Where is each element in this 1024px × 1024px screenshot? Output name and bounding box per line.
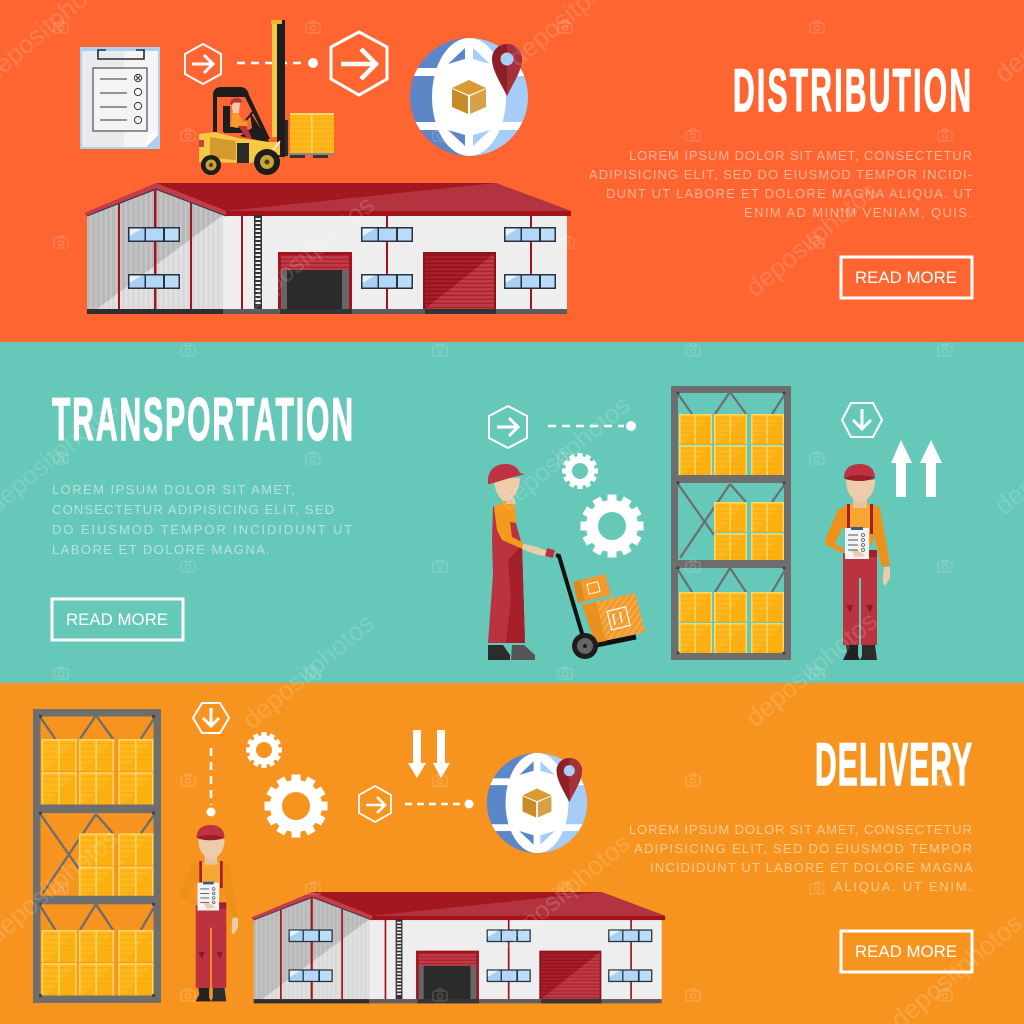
dashed connector with dot: [206, 748, 216, 816]
text block: transportation description: LOREM IPSUM DOLOR SIT AMET,: [52, 482, 295, 497]
icon: small gear: [246, 732, 282, 768]
icon: globe with parcel and location pin: [487, 753, 587, 853]
warehouse building: [251, 892, 665, 1003]
worker with clipboard: [825, 464, 890, 660]
icon: down arrows: [408, 730, 450, 778]
text block: distribution description: ADIPISICING ELIT, SED DO EIUSMOD TEMPOR INCIDI-: [589, 167, 972, 182]
text block: delivery description: LOREM IPSUM DOLOR SIT AMET, CONSECTETUR: [629, 822, 972, 837]
icon: large gear: [264, 774, 328, 838]
text block: transportation description: DO EIUSMOD TEMPOR INCIDIDUNT UT: [52, 522, 352, 537]
hand truck with boxes: [556, 555, 645, 659]
warehouse building: [84, 183, 571, 314]
dashed connector with dot: [405, 800, 474, 808]
icon: right arrow hexagon: [489, 406, 527, 448]
icon: right arrow hexagon: [359, 786, 391, 822]
watermark overlay: depositphotos: [740, 606, 883, 733]
watermark overlay: depositphotos: [740, 176, 883, 303]
icon: up arrows: [891, 440, 942, 497]
button: read more: [52, 599, 183, 640]
icon: globe with parcel and location pin: [410, 38, 528, 156]
title: Distribution: DISTRIBUTION: [733, 58, 971, 125]
button: read more: READ MORE: [66, 611, 168, 629]
text block: delivery description: ADIPISICING ELIT, SED DO EIUSMOD TEMPOR: [634, 841, 972, 856]
panel: delivery background: [0, 683, 1024, 1024]
watermark overlay: depositphotos: [237, 190, 380, 317]
icon: small gear: [562, 453, 598, 489]
icon: clipboard checklist: [80, 47, 160, 149]
text block: transportation description: LABORE ET DOLORE MAGNA.: [52, 542, 270, 557]
storage rack with crates: [33, 709, 161, 1003]
title: Delivery: DELIVERY: [815, 732, 972, 799]
text block: distribution description: ENIM AD MINIM VENIAM, QUIS.: [744, 205, 972, 220]
storage rack with crates: [671, 386, 791, 660]
text block: delivery description: INCIDIDUNT UT LABORE ET DOLORE MAGNA: [650, 860, 973, 875]
icon: forklift with driver and crate: [199, 20, 334, 175]
button: read more: READ MORE: [855, 269, 957, 287]
watermark overlay: depositphotos: [493, 828, 636, 955]
text block: transportation description: CONSECTETUR ADIPISICING ELIT, SED: [52, 502, 334, 517]
worker with clipboard: [179, 825, 238, 1001]
icon: down arrow hexagon: [193, 703, 229, 733]
watermark overlay: depositphotos: [493, 390, 636, 517]
icon: small right arrow hexagon: [185, 44, 221, 84]
panel: distribution background: [0, 0, 1024, 342]
dashed connector with dot: [237, 58, 318, 68]
dashed connector with dot: [548, 421, 636, 431]
text block: distribution description: DUNT UT LABORE ET DOLORE MAGNA ALIQUA. UT: [606, 186, 972, 201]
watermark overlay: depositphotos: [237, 608, 380, 735]
text block: distribution description: LOREM IPSUM DOLOR SIT AMET, CONSECTETUR: [629, 148, 972, 163]
text block: delivery description: ALIQUA. UT ENIM.: [834, 879, 972, 894]
button: read more: [841, 257, 972, 298]
worker pushing hand truck: [488, 464, 555, 660]
icon: large gear: [580, 494, 644, 558]
button: read more: [841, 931, 972, 972]
panel: transportation background: [0, 342, 1024, 683]
button: read more: READ MORE: [855, 943, 957, 961]
icon: large right arrow hexagon: [331, 32, 387, 95]
icon: down arrow hexagon: [842, 403, 882, 437]
title: Transportation: TRANSPORTATION: [52, 387, 353, 454]
